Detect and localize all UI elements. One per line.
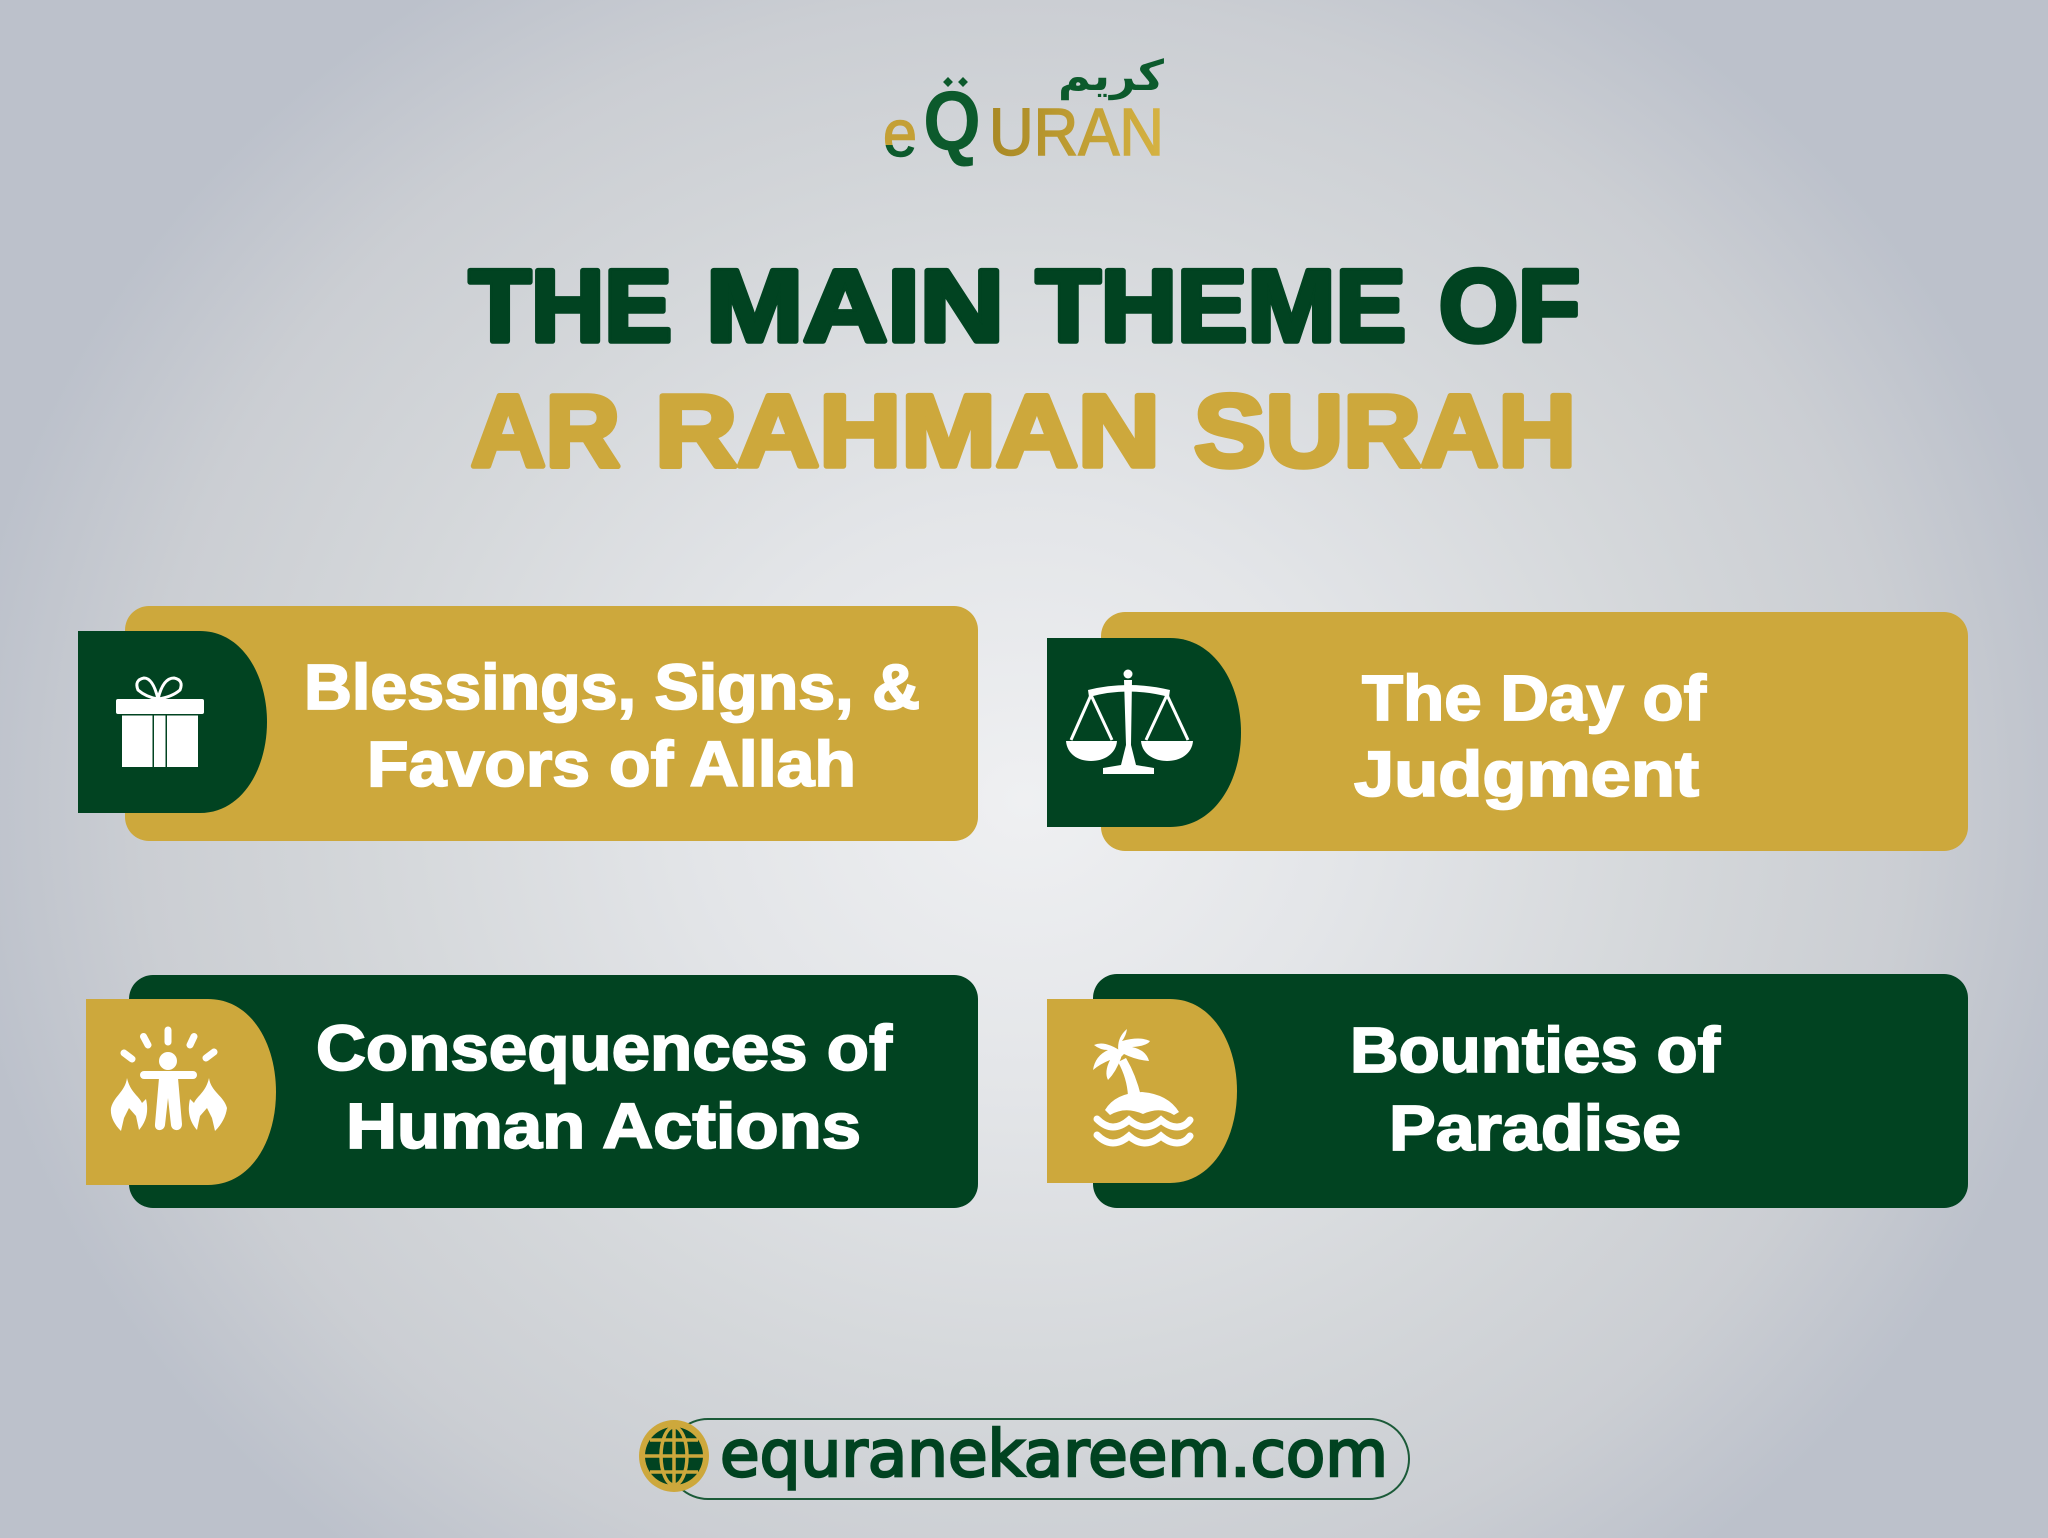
card text: Judgment	[1354, 738, 1699, 810]
logo: eQuran Kareem	[883, 51, 1165, 170]
card text: Blessings, Signs, &	[304, 651, 920, 723]
icon: gift	[116, 678, 204, 767]
card text	[1354, 662, 1707, 810]
logo Q dots	[943, 77, 968, 87]
icon tab	[86, 999, 276, 1185]
icon: human between flames	[111, 1030, 227, 1131]
card text: The Day of	[1362, 662, 1707, 734]
card text	[1350, 1014, 1721, 1164]
footer pill outline	[668, 1419, 1409, 1499]
title line 2: SURAH	[1194, 374, 1576, 488]
logo letters URAN: URAN	[989, 95, 1164, 170]
card background	[1101, 612, 1968, 851]
title line 1	[469, 249, 1580, 363]
card background	[125, 606, 978, 841]
card background	[1093, 974, 1968, 1208]
card text: Paradise	[1389, 1092, 1681, 1164]
icon: globe	[639, 1420, 709, 1492]
title line 2: RAHMAN	[655, 374, 1160, 488]
panel: the day of judgment	[1047, 612, 1968, 851]
icon tab	[78, 631, 267, 813]
title line 2: AR	[471, 374, 620, 488]
title line 2	[471, 374, 1576, 488]
website text: equranekareem.com	[720, 1418, 1388, 1492]
card background	[129, 975, 978, 1208]
title line 1: OF	[1439, 249, 1580, 363]
card text: Consequences of	[316, 1012, 893, 1084]
title line 1: THEME	[1036, 249, 1406, 363]
logo arabic word: كريم	[1058, 51, 1165, 101]
footer: website link	[639, 1418, 1409, 1499]
icon tab	[1047, 638, 1241, 827]
card text	[316, 1012, 893, 1162]
title line 1: THE	[469, 249, 672, 363]
panel: bounties of paradise	[1047, 974, 1968, 1208]
panel: blessings, signs and favors of Allah	[78, 606, 978, 841]
card text	[304, 651, 920, 800]
card text: Human Actions	[346, 1090, 861, 1162]
card text: Bounties of	[1350, 1014, 1721, 1086]
title line 1: MAIN	[706, 249, 1004, 363]
card text: Favors of Allah	[367, 728, 856, 800]
icon: palm island	[1093, 1029, 1190, 1143]
logo letter e: e	[883, 96, 917, 170]
title	[469, 249, 1580, 488]
logo letter Q: Q	[923, 74, 981, 168]
icon tab	[1047, 999, 1237, 1183]
panel: consequences of human actions	[86, 975, 978, 1208]
icon: scales of justice	[1066, 670, 1193, 774]
